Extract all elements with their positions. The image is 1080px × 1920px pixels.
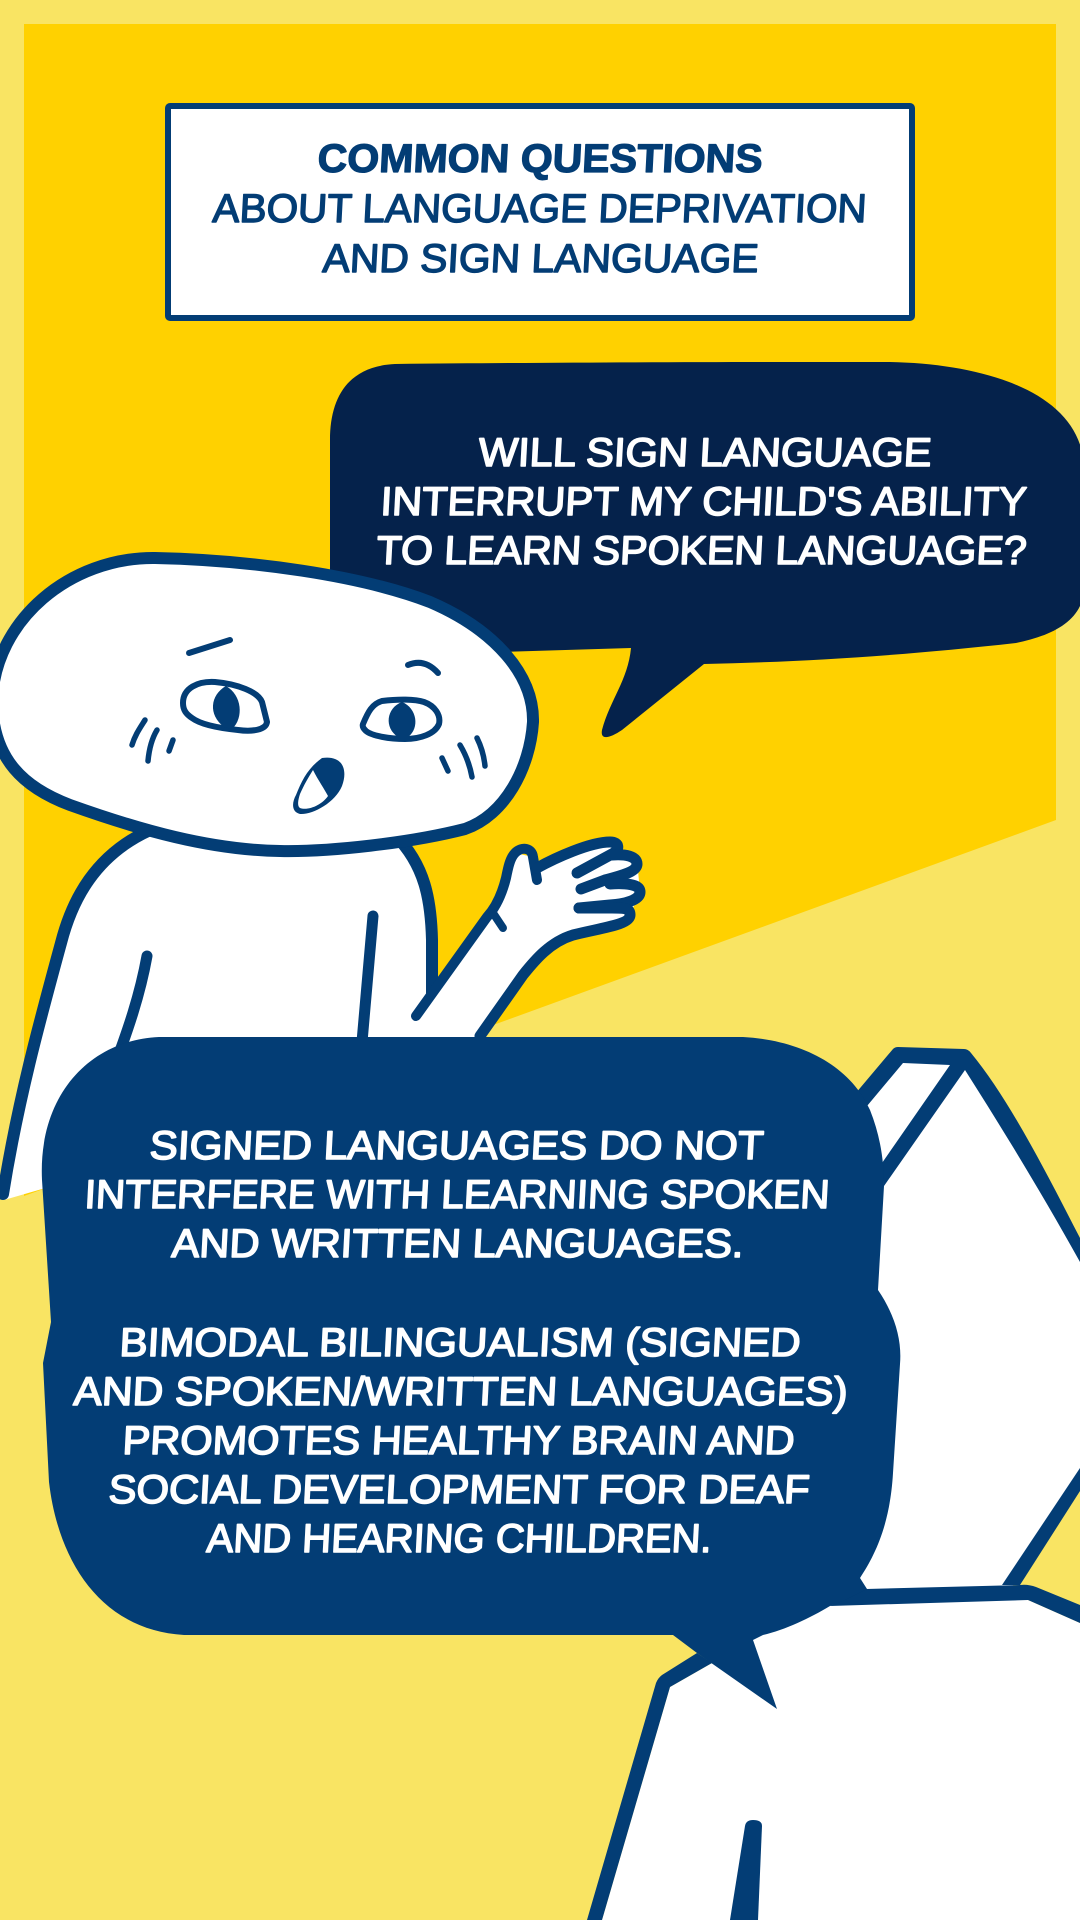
- question text: WILL SIGN LANGUAGE: [478, 431, 933, 475]
- answer text: second paragraph: AND HEARING CHILDREN.: [206, 1517, 713, 1561]
- question text: INTERRUPT MY CHILD'S ABILITY: [380, 480, 1028, 524]
- answer text: first paragraph: [84, 1124, 831, 1266]
- title text: AND SIGN LANGUAGE: [322, 237, 760, 281]
- body: [3, 830, 440, 1200]
- answer text: first paragraph: AND WRITTEN LANGUAGES.: [171, 1222, 745, 1266]
- answer text: first paragraph: SIGNED LANGUAGES DO NOT: [149, 1124, 765, 1168]
- answer text: second paragraph: [73, 1321, 849, 1561]
- question text: [376, 431, 1028, 573]
- question speech bubble: [330, 362, 1080, 737]
- question text: TO LEARN SPOKEN LANGUAGE?: [376, 529, 1028, 573]
- mouth: [293, 758, 344, 814]
- left eye: [183, 682, 267, 731]
- answer text: second paragraph: AND SPOKEN/WRITTEN LANGUAGES): [73, 1370, 849, 1414]
- head: [800, 1047, 1080, 1600]
- right eye: [363, 700, 439, 739]
- title text: COMMON QUESTIONS: [317, 137, 764, 181]
- title text: [212, 137, 868, 281]
- title text: ABOUT LANGUAGE DEPRIVATION: [212, 187, 868, 231]
- answer text: second paragraph: PROMOTES HEALTHY BRAIN AND: [122, 1419, 796, 1463]
- character: answering person: [587, 1047, 1080, 1920]
- title box: [168, 106, 912, 318]
- head: [0, 558, 533, 851]
- character: asking person: [0, 558, 640, 1200]
- answer text: second paragraph: SOCIAL DEVELOPMENT FOR DEAF: [108, 1468, 811, 1512]
- eyebrows: [189, 640, 438, 673]
- body: [587, 1585, 1080, 1920]
- arm and hand: [400, 842, 640, 1045]
- answer speech bubble: [42, 1037, 900, 1709]
- cheek lines: [132, 720, 485, 777]
- answer text: second paragraph: BIMODAL BILINGUALISM (SIGNED: [119, 1321, 802, 1365]
- answer text: first paragraph: INTERFERE WITH LEARNING SPOKEN: [84, 1173, 831, 1217]
